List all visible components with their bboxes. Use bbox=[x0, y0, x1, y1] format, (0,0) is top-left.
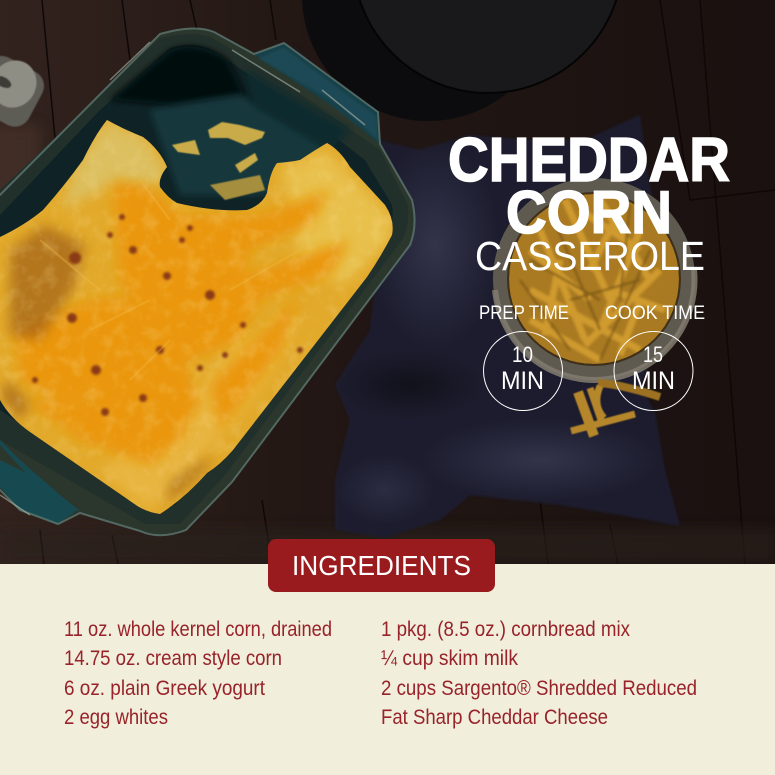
loose cheddar shreds bbox=[571, 383, 660, 436]
ingredient list: right column: 2 cups Sargento® Shredded Reduced bbox=[381, 677, 697, 700]
cream ingredients panel bbox=[0, 564, 775, 775]
casserole bbox=[0, 120, 393, 514]
brown spots bbox=[32, 214, 303, 416]
cook time: COOK TIME bbox=[605, 303, 705, 324]
prep time bbox=[479, 303, 569, 410]
ingredient list: left column bbox=[64, 618, 332, 729]
photo: casserole on wooden table bbox=[0, 0, 775, 564]
ingredients badge bbox=[268, 539, 495, 592]
ingredient list: left column: 14.75 oz. cream style corn bbox=[64, 647, 282, 670]
baking dish with handles bbox=[0, 28, 415, 535]
title bbox=[448, 126, 730, 279]
cook time: 15 bbox=[643, 342, 663, 367]
title: CORN bbox=[506, 179, 672, 246]
prep time: 10 bbox=[512, 342, 533, 367]
crumbs in dish bbox=[172, 122, 265, 200]
ingredient list: left column: 6 oz. plain Greek yogurt bbox=[64, 677, 265, 700]
prep time: PREP TIME bbox=[479, 303, 569, 324]
prep time: MIN bbox=[501, 367, 544, 395]
ingredient list: right column: Fat Sharp Cheddar Cheese bbox=[381, 706, 608, 729]
melted cheddar bbox=[15, 180, 350, 465]
browned crust bbox=[0, 225, 212, 505]
ingredient list: left column: 2 egg whites bbox=[64, 706, 168, 729]
cheese texture bbox=[0, 126, 392, 508]
navy napkin bbox=[292, 42, 680, 538]
title: CASSEROLE bbox=[475, 233, 705, 279]
ingredient list: right column bbox=[381, 618, 697, 729]
ingredients badge: INGREDIENTS bbox=[292, 550, 471, 581]
ingredient list: left column: 11 oz. whole kernel corn, drained bbox=[64, 618, 332, 641]
cook time: MIN bbox=[632, 367, 675, 395]
salt shaker bbox=[0, 56, 44, 128]
black plates bbox=[302, 0, 623, 121]
wooden table bbox=[0, 0, 775, 564]
ingredient list: right column: 1 pkg. (8.5 oz.) cornbread mix bbox=[381, 618, 630, 641]
bowl of shredded cheddar bbox=[493, 178, 695, 380]
title: CHEDDAR bbox=[448, 126, 730, 195]
ingredient list: right column: ¼ cup skim milk bbox=[381, 647, 518, 670]
cook time bbox=[605, 303, 705, 410]
